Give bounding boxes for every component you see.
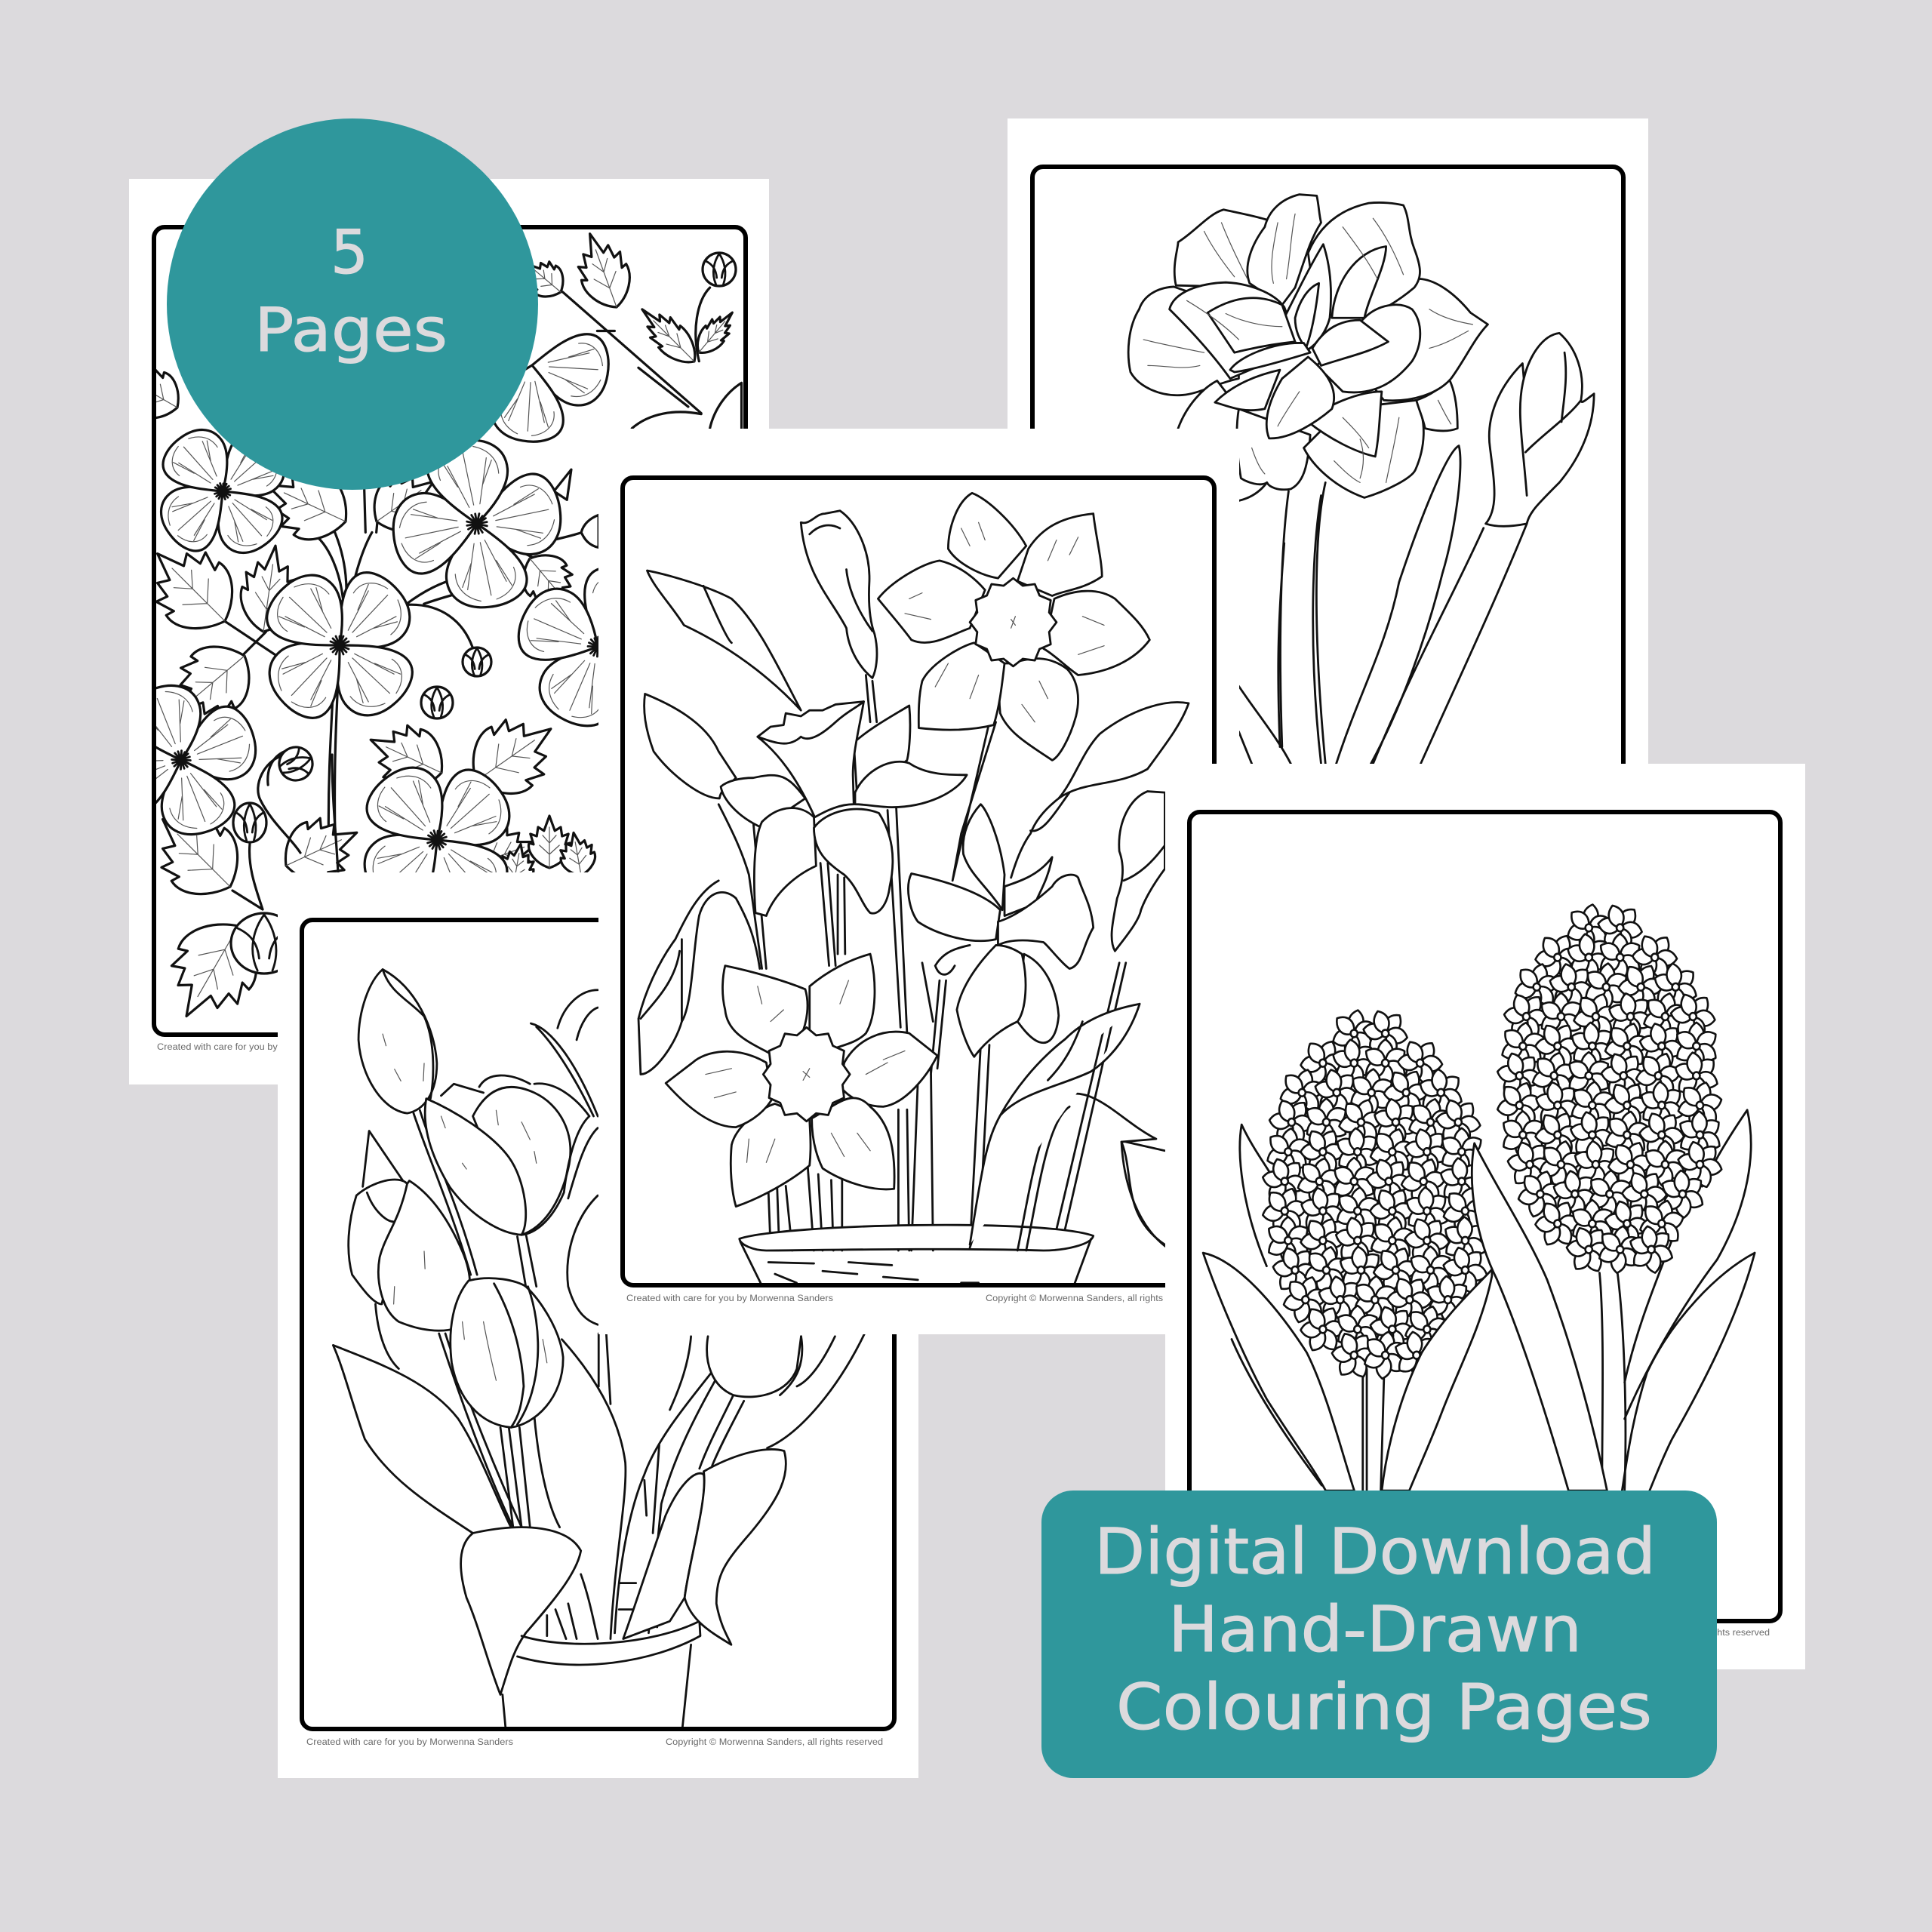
banner: digital download	[1041, 1491, 1717, 1778]
banner: digital download: Digital Download	[1094, 1515, 1656, 1589]
daffodil frame	[623, 478, 1214, 1285]
hyacinth footer	[1194, 1629, 1770, 1638]
page: floral pattern colouring sheet	[75, 179, 769, 1084]
hyacinth line art	[1203, 894, 1755, 1491]
page: amaryllis colouring sheet	[1008, 118, 1648, 764]
page: tulips colouring sheet	[278, 872, 918, 1778]
daffodil pot	[740, 1225, 1094, 1251]
daffodil: right trumpet flower	[908, 804, 1094, 1057]
daffodil: left trumpet flower	[721, 702, 967, 916]
amaryllis line art	[1128, 195, 1594, 764]
banner: digital download: Hand-Drawn	[1168, 1592, 1582, 1666]
hyacinth right flower spike	[1496, 903, 1722, 1274]
floral flowers	[75, 330, 705, 931]
floral frame	[154, 227, 746, 1035]
page: hyacinths colouring sheet	[1165, 764, 1805, 1669]
amaryllis frame	[1032, 167, 1623, 974]
daffodil footer: Copyright © Morwenna Sanders, all rights reserved	[986, 1294, 1203, 1303]
daffodil line art	[638, 493, 1189, 1286]
hyacinth back leaves and stems	[1240, 1110, 1755, 1491]
daffodil: top flower	[878, 493, 1149, 760]
tulip footer: Copyright © Morwenna Sanders, all rights reserved	[666, 1738, 883, 1747]
tulip line art	[333, 969, 865, 1727]
hyacinth left flower spike	[1262, 1009, 1487, 1380]
floral buds	[231, 253, 736, 974]
daffodil footer	[626, 1294, 1203, 1303]
badge: 5 pages: 5	[331, 217, 368, 288]
hyacinth frame	[1189, 812, 1780, 1621]
tulip footer: Created with care for you by Morwenna Sanders	[306, 1738, 513, 1747]
badge: 5 pages	[167, 118, 538, 490]
hyacinth front leaves	[1203, 1143, 1607, 1491]
daffodil footer: Created with care for you by Morwenna Sanders	[626, 1294, 833, 1303]
page: daffodils colouring sheet	[598, 429, 1239, 1334]
hyacinth footer: Copyright © Morwenna Sanders, all rights reserved	[1552, 1629, 1770, 1638]
partial flower beside the badge	[490, 330, 611, 445]
floral footer: Created with care for you by Morwenna Sanders	[157, 1043, 364, 1052]
banner: digital download: Colouring Pages	[1116, 1670, 1652, 1744]
badge: 5 pages: Pages	[254, 295, 448, 365]
daffodil: bottom flower	[666, 954, 937, 1207]
floral stems	[75, 226, 742, 1037]
tulip frame	[302, 920, 894, 1729]
tulip footer	[306, 1738, 883, 1747]
infographic canvas	[129, 118, 1805, 1778]
hyacinth footer: Created with care for you by Morwenna Sanders	[1194, 1629, 1401, 1638]
daffodil stems	[718, 675, 1126, 1251]
